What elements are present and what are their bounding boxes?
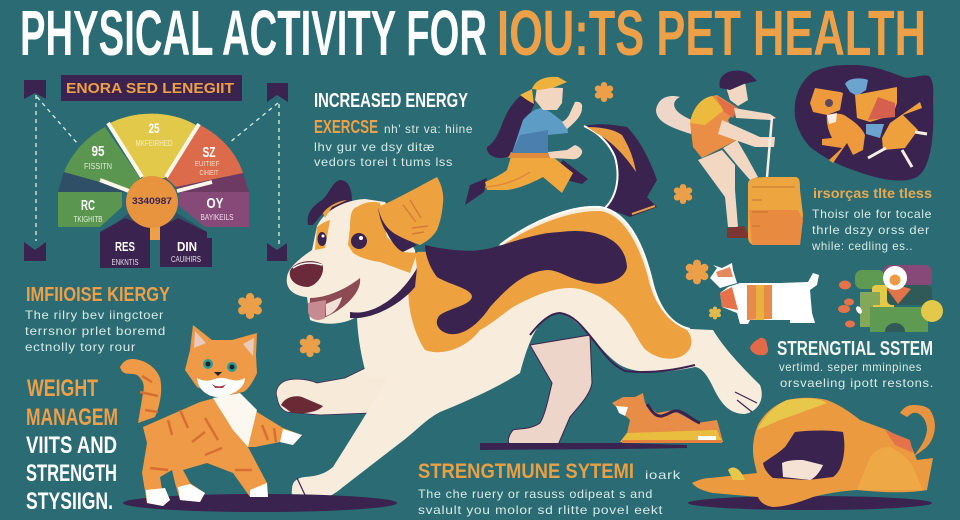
text block: increased energy: lhv gur ve dsy ditæ: [314, 140, 435, 154]
illustration: shadow under kitten and dog: [123, 494, 397, 512]
text block: immune system: [418, 460, 681, 517]
text block: left energy: ectnolly tory rour: [25, 340, 136, 354]
icon: puzzle: [838, 265, 943, 332]
back highlight: [500, 207, 690, 329]
tongue: [308, 300, 326, 320]
pet: koala and big dog: [845, 78, 927, 167]
text block: strength system: orsvaeling ipott restons.: [780, 376, 934, 390]
orange saddle: [408, 211, 691, 359]
gauge heading: [61, 75, 242, 101]
icons: flowers: [238, 82, 721, 357]
illustration: runner: [465, 77, 588, 205]
text block: strength system: vertimd. seper mminpines: [779, 360, 922, 374]
collar: [350, 268, 417, 318]
text block: fitness: thrle dszy orss der: [812, 223, 930, 237]
gauge chart: TKIGHITB: [74, 215, 102, 224]
hind leg: [857, 447, 923, 490]
gauge chart: EUITIEF: [194, 161, 220, 168]
head: [287, 177, 443, 324]
tail: [900, 405, 935, 457]
body: [292, 207, 762, 500]
body: [692, 398, 933, 507]
text block: fitness: while: cedling es..: [811, 239, 913, 253]
text block: immune system: ioark: [645, 468, 681, 482]
face: [287, 199, 417, 324]
text block: weight management: STYSIIGN.: [26, 488, 113, 515]
gauge chart: CIHIEIT: [200, 170, 219, 177]
arrows: dashed brackets around gauge: [24, 80, 288, 261]
text block: fitness: Thoisr ole for tocale: [812, 207, 932, 221]
eyes: [203, 359, 213, 369]
muzzle: [782, 460, 823, 480]
text block: increased energy: INCREASED ENERGY: [314, 90, 468, 112]
text block: increased energy: nh' str va: hiine: [384, 122, 473, 136]
orange face patch: [348, 202, 417, 273]
illustration: paw shadow: [480, 443, 687, 450]
text block: weight management: WEIGHT: [27, 375, 98, 402]
illustration: main dog: [276, 124, 762, 500]
right ear: [378, 177, 443, 245]
nose: [290, 261, 323, 287]
paw pad: [281, 396, 323, 413]
text block: left energy: IMFIIOISE KIERGY: [26, 284, 171, 306]
far foreleg: [276, 355, 400, 415]
left ear: [308, 180, 352, 225]
illustration: kitten: [120, 325, 302, 506]
text block: left energy: [25, 284, 171, 354]
gauge heading: ENORA SED LENEGIIT: [66, 81, 234, 97]
panel: dark blob with pets: [795, 65, 933, 181]
text block: left energy: terrsnor prlet boremd: [25, 324, 166, 338]
text block: increased energy: EXERCSE: [314, 117, 378, 137]
dark ear band: [378, 208, 417, 252]
eyes: [318, 232, 326, 246]
gauge chart: DIN: [177, 239, 197, 254]
gauge chart: RC: [81, 197, 95, 214]
gauge chart: BAYIKEILS: [200, 213, 234, 222]
icon: orange-red leaf: [750, 338, 768, 355]
tail: [120, 359, 161, 423]
ears and head: [185, 325, 257, 397]
text block: weight management: STRENGTH: [26, 460, 117, 487]
illustration: big orange resting dog: [688, 398, 935, 510]
text block: immune system: svalult you molor sd rlitte poveI eekt: [418, 503, 663, 517]
text block: weight management: VIITS AND: [26, 432, 117, 459]
text block: fitness: [811, 186, 932, 253]
text block: increased energy: [314, 90, 473, 169]
gauge chart: [58, 114, 249, 268]
gauge chart: OY: [206, 195, 224, 212]
belly and paw lines: [530, 313, 695, 372]
text block: increased energy: vedors torei t tums lss: [314, 155, 453, 169]
paws: [280, 429, 302, 445]
text block: immune system: STRENGTMUNE SYTEMI: [418, 460, 634, 483]
dark patch: [425, 231, 627, 334]
illustration: small sleeping cat: [612, 393, 723, 443]
chest: [213, 393, 257, 447]
gauge chart: SZ: [202, 144, 216, 161]
text block: immune system: The che ruery or rasuss odipeat s and: [418, 487, 653, 501]
text block: weight management: MANAGEM: [26, 404, 118, 431]
tooth: [326, 297, 342, 316]
yellow toy: [728, 467, 745, 480]
gauge chart: CAUIHIRS: [171, 255, 201, 264]
gauge chart: FISSITN: [84, 162, 112, 171]
stripes: [140, 376, 276, 470]
body: [142, 398, 302, 506]
illustration: man with box: [656, 70, 803, 245]
text block: fitness: irsorças tlte tless: [813, 186, 932, 201]
gauge chart: MKFEIRHED: [136, 139, 173, 148]
gauge chart: 95: [92, 143, 104, 160]
illustration: small white cat: [710, 263, 819, 324]
gauge chart: 3340987: [132, 196, 172, 206]
mouth: [309, 278, 360, 319]
text block: weight management: [26, 375, 118, 515]
gauge chart: ENKNTIS: [112, 258, 138, 267]
near hind leg: [508, 335, 592, 445]
dark head: [763, 430, 844, 480]
gauge chart: 25: [148, 120, 160, 136]
text block: strength system: [777, 338, 934, 390]
pet: left cat: [810, 88, 865, 163]
gauge chart: RES: [115, 239, 135, 254]
tail: [584, 124, 657, 217]
text block: left energy: The rilry bev iingctoer: [25, 308, 164, 322]
